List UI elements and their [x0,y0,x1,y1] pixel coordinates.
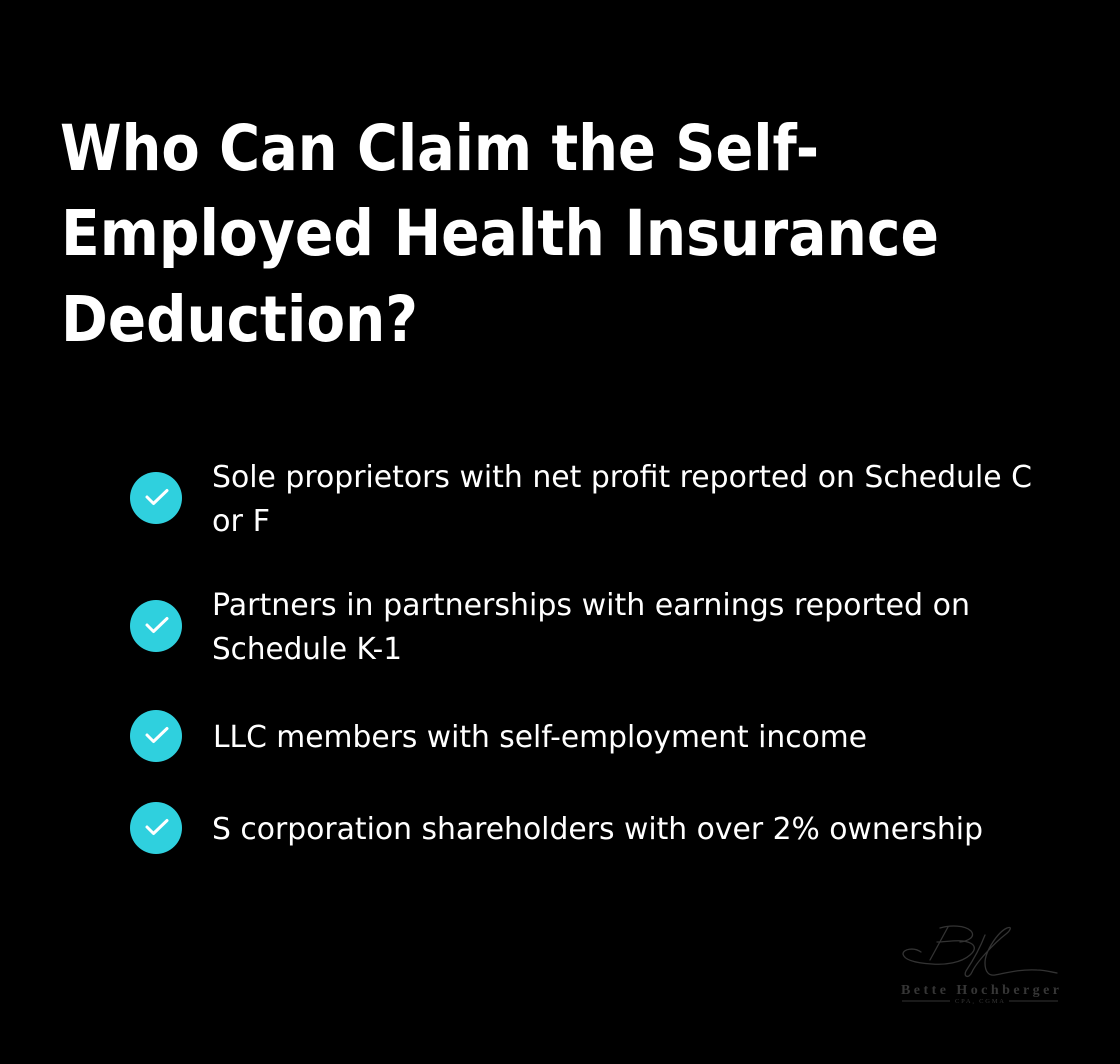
text: partners [212,588,970,667]
list item: LLC members [130,710,867,762]
logo rules [902,1000,1058,1002]
text: sole proprietors [212,460,1032,539]
text: sole proprietors: or F [212,504,270,539]
list item: partners [130,588,970,667]
icon: BH monogram [903,926,1057,976]
text: credentials: CPA, CGMA [955,998,1004,1005]
title: Employed Health Insurance [61,197,939,270]
icon: check circle [130,472,182,524]
text: S corporation: S corporation shareholders with over 2% ownership [212,812,983,847]
icon: check circle [130,710,182,762]
title: Who Can Claim the Self- [60,112,819,185]
text: Bette Hochberger: Bette Hochberger [901,983,1059,998]
list item: sole proprietors [130,460,1032,539]
title [60,112,939,356]
list item: S corporation [130,802,983,854]
text: LLC members: LLC members with self-employment income [213,720,867,755]
text: partners: Schedule K-1 [212,632,402,667]
title: Deduction? [61,283,418,356]
icon: check circle [130,600,182,652]
icon: check circle [130,802,182,854]
logo: Bette Hochberger signature [901,926,1059,1005]
text: sole proprietors: Sole proprietors with net profit reported on Schedule C [212,460,1032,495]
text: partners: Partners in partnerships with earnings reported on [212,588,970,623]
